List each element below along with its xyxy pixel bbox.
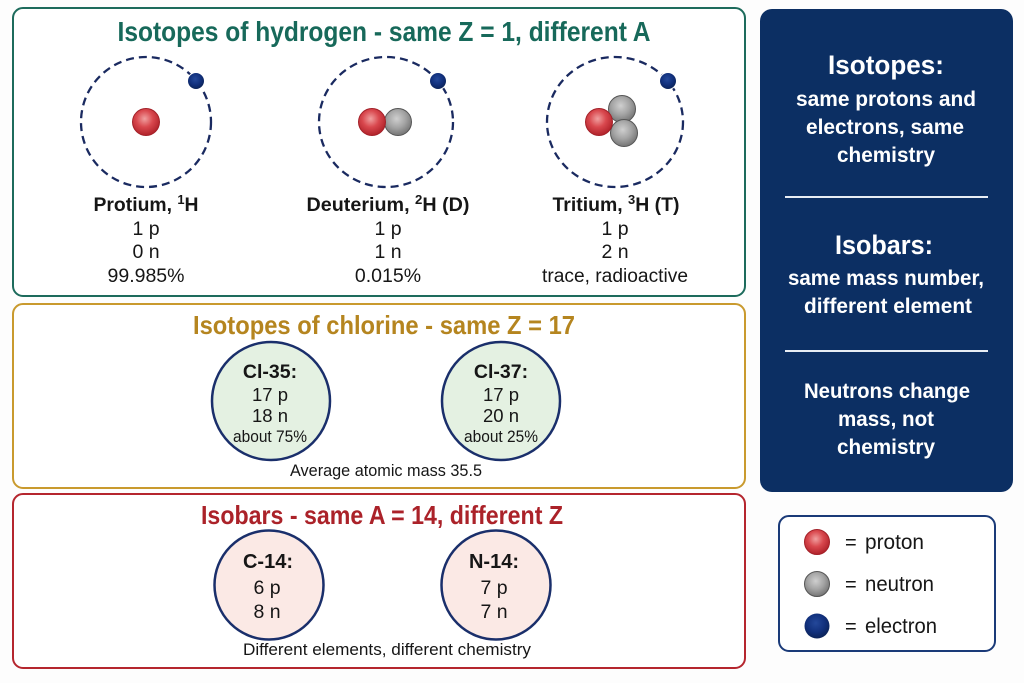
circle: Cl-35: 17 p: [252, 384, 288, 405]
text: tritium details: 2 n: [601, 241, 629, 263]
legend item: proton: =: [845, 532, 857, 554]
text: tritium details: 3: [628, 192, 635, 207]
panel: isotopes of hydrogen: [13, 8, 745, 296]
text: protium details: 1 p: [132, 218, 160, 240]
legend: [779, 516, 995, 651]
legend item: electron: =: [845, 616, 857, 638]
legend item: proton: [804, 530, 924, 554]
text: protium details: H: [185, 194, 198, 216]
heading: isotopes of chlorine: Isotopes of chlorine - same Z = 17: [193, 310, 575, 340]
circle: Cl-35: [212, 342, 330, 460]
text: isobars summary: same mass number,: [788, 267, 984, 290]
circle: C-14: 8 n: [253, 601, 281, 623]
text: isobars summary: different element: [804, 295, 972, 318]
text: tritium details: trace, radioactive: [542, 266, 688, 287]
text: tritium details: H (T): [635, 194, 680, 216]
circle: Cl-37: 17 p: [483, 384, 519, 405]
text: deuterium details: Deuterium,: [306, 194, 408, 216]
legend item: neutron: =: [845, 574, 857, 596]
circle: Cl-37: Cl-37:: [474, 361, 528, 383]
legend item: neutron: [804, 572, 934, 596]
panel: isobars: [13, 494, 745, 668]
text: deuterium details: 1 p: [374, 218, 402, 240]
circle: N-14: [442, 530, 550, 640]
legend item: electron: [804, 614, 937, 638]
circle: C-14: C-14:: [243, 551, 293, 573]
circle: N-14: 7 p: [480, 577, 508, 599]
text: protium details: 0 n: [132, 241, 160, 263]
circle: C-14: 6 p: [253, 577, 281, 599]
atom: deuterium: [319, 57, 453, 187]
circle: Cl-35: Cl-35:: [243, 361, 297, 383]
text: protium details: 99.985%: [108, 265, 184, 287]
text: deuterium details: H (D): [422, 194, 470, 216]
atom: tritium: [547, 57, 683, 187]
heading: isobars: Isobars - same A = 14, different Z: [201, 500, 563, 530]
circle: Cl-37: 20 n: [483, 405, 519, 426]
text: neutrons summary: Neutrons change: [804, 380, 970, 403]
text: protium details: [94, 192, 198, 287]
text: isotopes summary: chemistry: [837, 144, 935, 167]
text: neutrons summary: chemistry: [837, 436, 935, 459]
text: isotopes summary: same protons and: [796, 88, 976, 111]
atom: protium: [81, 57, 211, 187]
text: deuterium details: 1 n: [374, 241, 402, 263]
circle: Cl-37: [442, 342, 560, 460]
legend item: electron: electron: [865, 614, 937, 638]
text: protium details: 1: [177, 192, 185, 207]
panel: summary: [760, 9, 1013, 492]
text: deuterium details: 2: [415, 192, 422, 207]
text: different chemistry: Different elements, different chemistry: [243, 640, 531, 659]
text: deuterium details: [306, 192, 470, 287]
text: isobars summary: Isobars:: [835, 230, 933, 260]
text: deuterium details: 0.015%: [355, 265, 421, 287]
circle: N-14: N-14:: [469, 551, 519, 573]
text: average atomic mass: Average atomic mass 35.5: [290, 461, 482, 480]
text: protium details: Protium,: [94, 194, 173, 216]
text: neutrons summary: mass, not: [838, 408, 934, 431]
heading: isotopes of hydrogen: Isotopes of hydrogen - same Z = 1, different A: [118, 16, 650, 47]
circle: Cl-35: 18 n: [252, 405, 288, 426]
circle: Cl-35: about 75%: [233, 428, 307, 446]
text: tritium details: [542, 192, 688, 287]
text: isotopes summary: Isotopes:: [828, 50, 944, 80]
legend item: proton: proton: [865, 530, 924, 554]
text: isotopes summary: electrons, same: [806, 116, 964, 139]
panel: isotopes of chlorine: [13, 304, 745, 488]
legend item: neutron: neutron: [865, 572, 934, 596]
circle: Cl-37: about 25%: [464, 428, 538, 446]
text: tritium details: Tritium,: [552, 194, 623, 216]
circle: C-14: [214, 530, 324, 640]
text: tritium details: 1 p: [601, 218, 629, 240]
text: isotopes summary: [796, 50, 976, 167]
circle: N-14: 7 n: [480, 601, 508, 623]
text: isobars summary: [788, 230, 984, 318]
text: neutrons summary: [804, 380, 970, 459]
